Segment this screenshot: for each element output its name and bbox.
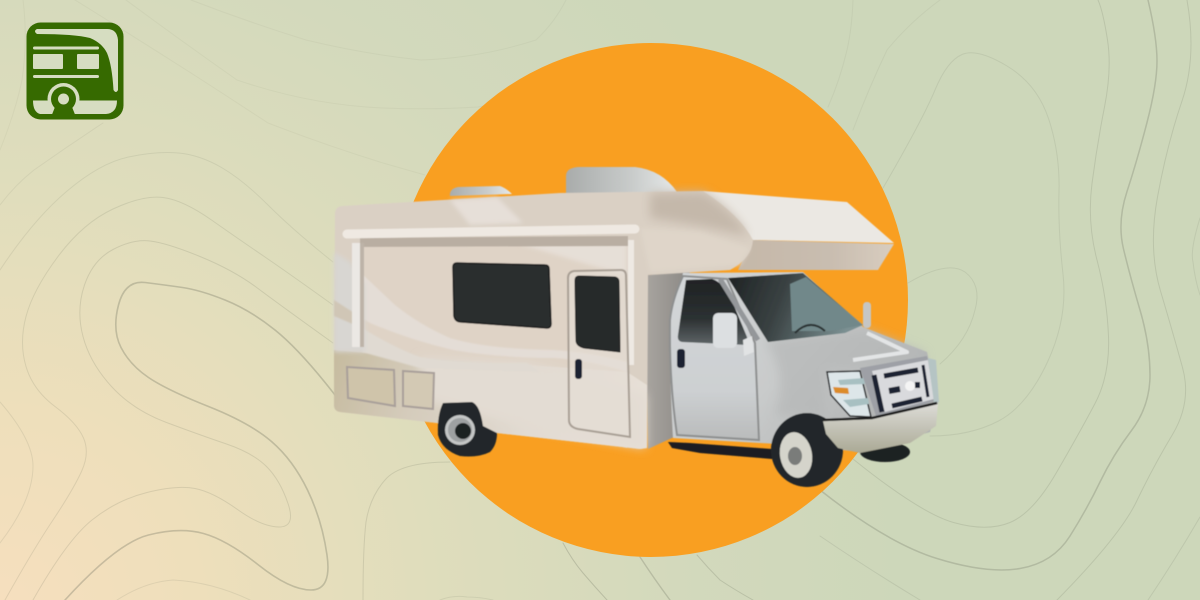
tan band — [334, 300, 362, 328]
under-cab shadow — [668, 442, 772, 459]
door handle — [575, 359, 582, 379]
front mirror stalk — [863, 302, 871, 328]
door side window — [678, 279, 748, 345]
headlight — [827, 371, 871, 417]
grey left fade — [334, 252, 365, 352]
hood shading — [765, 328, 925, 420]
roof highlight — [450, 197, 523, 225]
door handle — [677, 349, 685, 368]
storage hatch right — [403, 371, 434, 409]
far front wheel — [860, 442, 910, 462]
overcab light band — [640, 228, 750, 272]
awning arm shadow — [360, 243, 364, 347]
cab body — [670, 272, 938, 452]
living-area body — [334, 191, 753, 449]
side panel — [362, 240, 627, 448]
hood highlight — [853, 333, 907, 360]
overcab shading — [650, 192, 748, 236]
awning bar — [347, 229, 635, 234]
roof air conditioner — [566, 167, 677, 194]
passenger glass — [790, 277, 862, 331]
overcab underside — [738, 240, 894, 270]
lower body cream — [420, 358, 645, 448]
lighter diagonal — [520, 240, 627, 275]
steering wheel — [795, 325, 825, 333]
icon: green camper trailer badge — [26, 22, 124, 120]
overcab top — [703, 191, 894, 243]
bumper line — [823, 403, 937, 420]
right awning arm — [628, 240, 634, 365]
cab door — [670, 276, 759, 440]
cab inner wall — [645, 272, 690, 449]
orange circle — [394, 43, 908, 557]
awning shadow — [360, 236, 628, 247]
storage hatch left — [347, 367, 395, 406]
grille — [860, 356, 939, 419]
bumper — [823, 404, 938, 453]
lower body — [334, 350, 647, 449]
main window — [453, 263, 551, 328]
lower swoosh — [362, 328, 540, 372]
pillar — [720, 279, 758, 340]
light swoosh — [358, 272, 627, 372]
left awning arm — [352, 243, 360, 347]
windshield — [728, 273, 863, 342]
small roof vent — [450, 186, 512, 196]
front wheel — [771, 413, 843, 487]
side mirror — [713, 313, 754, 356]
motorhome — [334, 167, 939, 487]
door window — [575, 276, 620, 352]
entry door — [568, 270, 630, 437]
rear wheel — [438, 402, 497, 456]
